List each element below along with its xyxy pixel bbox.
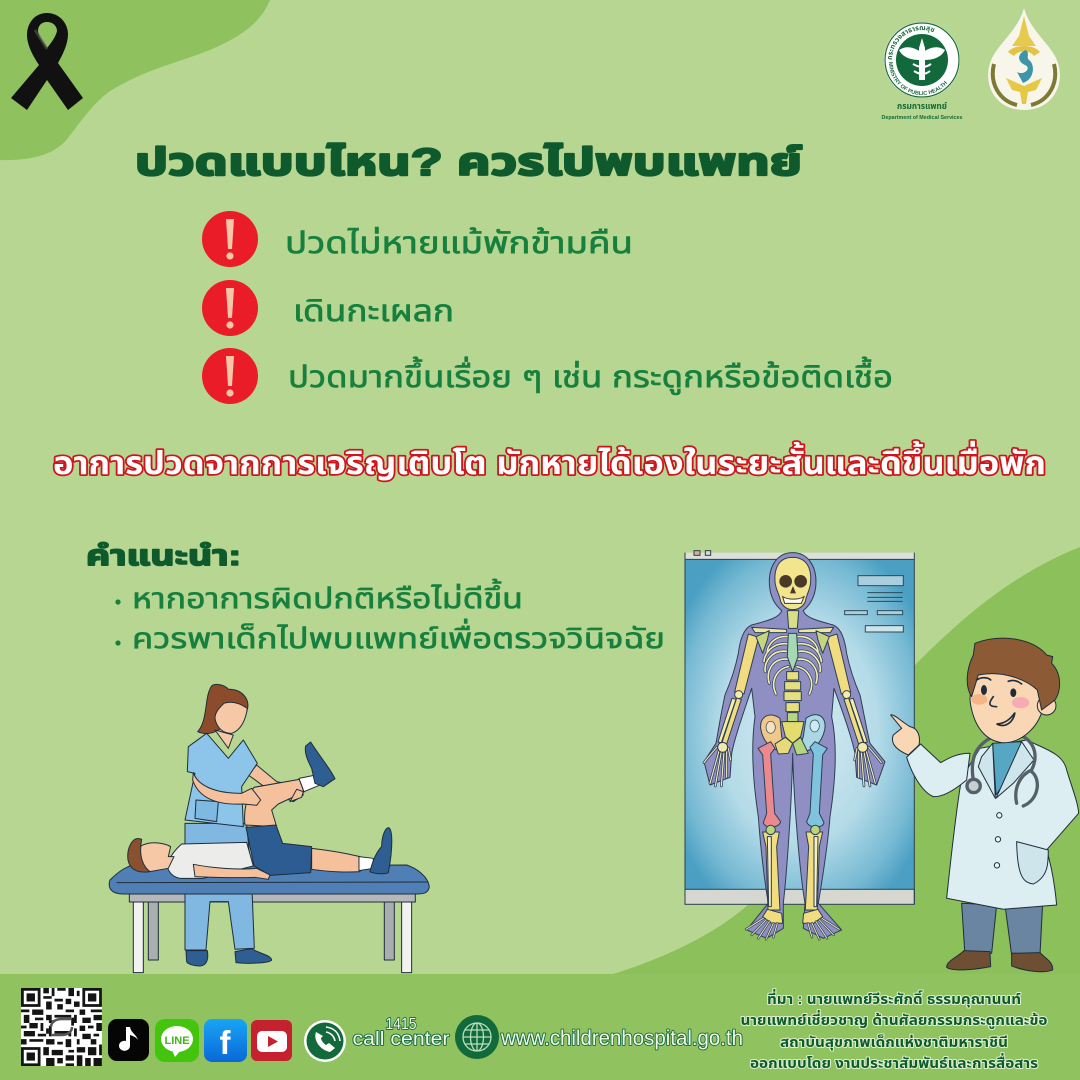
icon: globe — [455, 1015, 499, 1059]
advice bullet 2: ควรพาเด็กไปพบแพทย์เพื่อตรวจวินิจฉัย — [132, 618, 665, 655]
warning item 3: ปวดมากขึ้นเรื่อย ๆ เช่น กระดูกหรือข้อติดเชื้อ — [288, 356, 893, 395]
nurse — [185, 684, 303, 966]
logo: Ministry of Public Health — [882, 22, 962, 121]
footer band — [0, 974, 1080, 1080]
corner shape: bottom right — [610, 547, 1080, 975]
warning item 3 — [202, 348, 893, 404]
source credits: ที่มา : นายแพทย์วีระศักดิ์ ธรรมคุณานนท์ — [767, 988, 1021, 1008]
poster board — [685, 551, 914, 904]
source credits: สถาบันสุขภาพเด็กแห่งชาติมหาราชินี — [780, 1034, 1008, 1051]
doctor head — [967, 638, 1060, 743]
logo: children's hospital drop — [988, 8, 1060, 110]
advice heading: คำแนะนำ: — [86, 540, 241, 571]
website address: www.childrenhospital.go.th — [500, 1027, 743, 1050]
warning item 2: เดินกะเผลก — [293, 295, 454, 328]
warning list — [202, 211, 893, 404]
body silhouette — [704, 553, 885, 938]
warning item 1: ปวดไม่หายแม้พักข้ามคืน — [285, 227, 633, 260]
source credits — [740, 988, 1048, 1072]
red highlighted statement: อาการปวดจากการเจริญเติบโต มักหายได้เองในระยะสั้นและดีขึ้นเมื่อพัก — [53, 440, 1046, 481]
illustration: doctor — [891, 638, 1079, 972]
icon: youtube — [251, 1020, 292, 1061]
icon: facebook: f — [220, 1024, 232, 1061]
icon: phone — [304, 1020, 346, 1062]
qr code — [21, 988, 102, 1066]
icon: line: LINE — [164, 1035, 190, 1047]
call center label: call center — [352, 1029, 450, 1050]
doctor coat — [907, 740, 1079, 909]
warning item 2 — [202, 280, 454, 336]
call center label: 1415 — [386, 1016, 417, 1033]
title: ปวดแบบไหน? ควรไปพบแพทย์ — [135, 142, 802, 184]
call center label — [352, 1016, 450, 1050]
source credits: นายแพทย์เชี่ยวชาญ ด้านศัลยกรรมกระดูกและข้อ — [740, 1009, 1048, 1030]
icon: line — [155, 1019, 199, 1062]
stethoscope — [967, 737, 1037, 806]
logo: Ministry of Public Health: Department of Medical Services — [882, 115, 962, 121]
nurse front arm and hands — [193, 773, 303, 805]
doctor legs and shoes — [947, 903, 1053, 972]
corner shape: top left — [0, 0, 270, 160]
icon: facebook — [204, 1019, 247, 1062]
illustration: nurse treating patient on table — [109, 684, 429, 973]
illustration: skeleton poster — [685, 551, 914, 939]
logo: Ministry of Public Health: MINISTRY OF PUBLIC HEALTH — [888, 62, 948, 95]
table legs — [129, 893, 415, 973]
patient — [109, 742, 429, 894]
icon: black mourning ribbon — [11, 13, 83, 110]
doctor pointing hand — [891, 715, 919, 755]
warning item 1 — [202, 211, 633, 267]
icon: tiktok — [108, 1019, 149, 1061]
poster label marks — [845, 576, 903, 632]
advice list — [115, 578, 665, 655]
logo: Ministry of Public Health: กรมการแพทย์ — [897, 101, 947, 111]
skeleton bones — [704, 557, 881, 939]
source credits: ออกแบบโดย งานประชาสัมพันธ์และการสื่อสาร — [750, 1052, 1038, 1072]
logo: Ministry of Public Health: กระทรวงสาธารณสุข — [888, 26, 934, 60]
advice bullet 1: หากอาการผิดปกติหรือไม่ดีขึ้น — [132, 578, 523, 615]
